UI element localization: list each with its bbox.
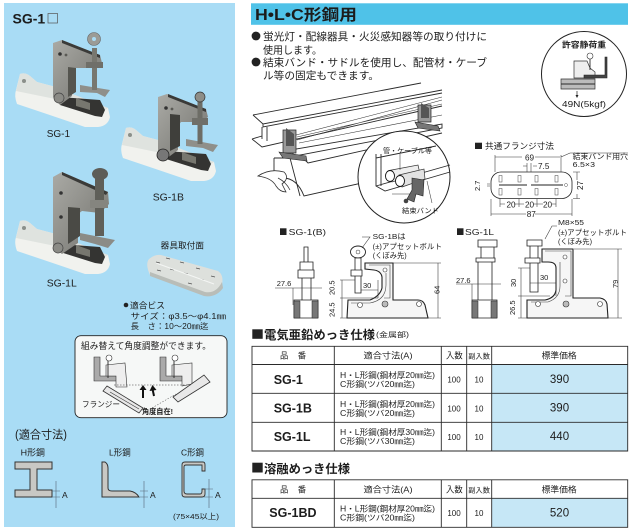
front view: 20.5 (328, 280, 336, 295)
front view (328, 232, 442, 318)
row: SG-1: 100 (447, 376, 461, 384)
row: SG-1BD: C形鋼(ツバ20㎜迄) (340, 512, 415, 522)
diagram: common flange dimensions: 2.7 (473, 181, 482, 191)
compatible screw specification: サイズ：φ3.5～φ4.1㎜ (131, 311, 226, 321)
front view: M8×55 (558, 218, 584, 227)
diagram: common flange dimensions: 共通フランジ寸法 (485, 141, 554, 151)
side view: 27.6 (277, 279, 291, 288)
front view: 64 (432, 286, 442, 294)
front view: 30 (363, 281, 371, 290)
front view: (±)アプセットボルト (558, 228, 627, 237)
photo: mounting face plate (147, 255, 223, 296)
row: SG-1B: 390 (550, 402, 569, 414)
row: SG-1: H・L形鋼(鋼材厚20㎜迄) (340, 370, 435, 380)
fixture: right clamp (415, 103, 440, 131)
callout: pipes and cable tie detail (358, 131, 450, 223)
header row (280, 484, 577, 494)
row: SG-1: SG-1 (274, 373, 303, 387)
heading: electro-galvanized spec (252, 327, 409, 342)
diagram: common flange dimensions (473, 141, 629, 219)
row: SG-1B: 10 (475, 404, 484, 414)
row: SG-1 (274, 370, 569, 389)
illustration: right clamp tilted (160, 355, 210, 402)
row: SG-1BD: SG-1BD (269, 506, 317, 520)
header row: 適合寸法(A) (364, 350, 413, 360)
row: SG-1BD: H・L形鋼(鋼材厚20㎜迄) (340, 504, 435, 514)
row: SG-1L: 100 (447, 433, 461, 442)
feature bullet list (252, 30, 487, 82)
diagram: L steel (102, 448, 156, 508)
diagram: SG-1(B) dimensions: SG-1(B) (289, 227, 326, 237)
diagram: C steel (173, 448, 221, 521)
side view (275, 247, 322, 318)
front view: 26.5 (508, 300, 517, 315)
front view: 24.5 (328, 302, 336, 317)
diagram: L steel: A (150, 490, 156, 500)
diagram: H steel: H形鋼 (21, 448, 45, 458)
diagram: common flange dimensions: 7.5 (538, 162, 550, 171)
diagram: L steel: L形鋼 (109, 448, 131, 458)
label: flange: フランジー (82, 400, 120, 409)
label: free angle: 角度自在! (142, 406, 173, 416)
header row (280, 350, 577, 360)
row: SG-1BD (269, 504, 569, 522)
front view: 79 (611, 280, 620, 288)
header row: 副入数 (468, 352, 490, 360)
row: SG-1L: C形鋼(ツバ30㎜迄) (340, 436, 415, 446)
row: SG-1: 10 (475, 376, 484, 384)
product photo: SG-1 (15, 32, 110, 127)
side view (456, 240, 501, 318)
row: SG-1B (274, 399, 569, 418)
side view: 27.6 (456, 276, 471, 285)
title band: H•L•C形鋼用 (255, 6, 357, 24)
heading: electro-galvanized spec: 電気亜鉛めっき仕様 (264, 327, 375, 342)
row: SG-1BD: 100 (447, 509, 461, 518)
callout: pipes and cable tie detail: 結束バンド (402, 206, 439, 215)
heading: electro-galvanized spec: (金属部) (376, 330, 409, 339)
diagram: common flange dimensions: 6.5×3 (573, 160, 595, 169)
feature bullet list: 結束バンド・サドルを使用し、配管材・ケーブ (263, 56, 487, 69)
product photo: SG-1L (15, 168, 115, 274)
row: SG-1: 390 (550, 374, 569, 386)
diagram: common flange dimensions: 20 (543, 200, 553, 210)
fixture: left clamp (279, 128, 307, 161)
header row: 標準価格 (542, 484, 577, 494)
header row: 適合寸法(A) (364, 484, 413, 494)
illustration: left clamp tilted (94, 355, 143, 413)
feature bullet list: 使用します。 (263, 44, 322, 56)
diagram: common flange dimensions: 結束バンド用穴 (573, 151, 629, 161)
header row: 品 番 (280, 350, 307, 360)
diagram: C steel: A (215, 490, 221, 500)
callout: allowable static load: 49N(5kgf) (562, 99, 606, 109)
front view: SG-1Bは (373, 232, 406, 241)
row: SG-1L: SG-1L (274, 430, 311, 444)
row: SG-1B: 100 (447, 404, 461, 414)
callout: allowable static load: 許容静荷重 (562, 40, 606, 50)
row: SG-1L: 440 (550, 431, 569, 443)
feature bullet list: 蛍光灯・配線器具・火災感知器等の取り付けに (263, 30, 487, 43)
feature bullet list: ル等の固定もできます。 (263, 69, 379, 82)
product photo: SG-1B (121, 92, 218, 181)
diagram: SG-1L dimensions: SG-1L (465, 227, 494, 237)
front view: 30 (509, 279, 518, 287)
diagram: common flange dimensions: 20 (525, 200, 535, 210)
heading: hot-dip spec: 溶融めっき仕様 (264, 461, 350, 476)
diagram: H steel: A (62, 490, 68, 500)
row: SG-1BD: 520 (550, 508, 569, 520)
header row: 品 番 (280, 484, 307, 494)
header row: 副入数 (468, 486, 490, 494)
callout: angle adjustment (75, 336, 227, 418)
front view: 30 (540, 273, 548, 282)
row: SG-1: C形鋼(ツバ20㎜迄) (340, 379, 415, 389)
row: SG-1B: H・L形鋼(鋼材厚20㎜迄) (340, 399, 435, 409)
header row: 入数 (446, 350, 463, 360)
diagram: H steel (15, 448, 68, 508)
front view: (±)アプセットボルト (373, 242, 442, 251)
arrows: angle direction (114, 385, 192, 408)
callout: allowable static load (542, 32, 626, 116)
diagram: common flange dimensions: 87 (527, 210, 536, 219)
diagram: common flange dimensions: 20 (506, 200, 516, 210)
row: SG-1B: C形鋼(ツバ20㎜迄) (340, 408, 415, 418)
front view (508, 218, 627, 318)
header row: 入数 (446, 484, 463, 494)
diagram: common flange dimensions: 27 (576, 180, 585, 190)
callout: pipes and cable tie detail: 管・ケーブル等 (383, 146, 432, 155)
label: SG-1: SG-1 (47, 129, 70, 140)
table: electro-galvanized prices (252, 346, 628, 451)
table: hot-dip prices (252, 480, 628, 528)
diagram: C steel: (75×45以上) (173, 512, 220, 521)
row: SG-1L: 10 (475, 433, 484, 442)
front view: (くぼみ先) (373, 250, 407, 260)
compatible screw specification (124, 300, 226, 331)
illustration: H steel with fixture mounted (252, 83, 442, 196)
compatible screw specification: 適合ビス (130, 300, 165, 310)
row: SG-1L (274, 427, 569, 446)
callout: angle adjustment: 組み替えて角度調整ができます。 (81, 340, 211, 351)
title band (251, 3, 628, 25)
diagram: SG-1L dimensions (456, 218, 627, 318)
model series heading: SG-1 (12, 10, 45, 26)
row: SG-1L: H・L形鋼(鋼材厚30㎜迄) (340, 427, 435, 437)
row: SG-1BD: 10 (475, 509, 484, 518)
label: mounting face: 器具取付面 (161, 240, 204, 250)
pipes (386, 165, 425, 187)
row: SG-1B: SG-1B (274, 402, 312, 416)
header row: 標準価格 (542, 350, 577, 360)
panel: product photos background (4, 3, 235, 527)
label: SG-1L: SG-1L (47, 278, 77, 290)
diagram: SG-1(B) dimensions (275, 227, 442, 318)
front view: (くぼみ先) (558, 236, 592, 246)
heading: compatible dimensions: (適合寸法) (15, 428, 67, 442)
diagram: common flange dimensions: 69 (525, 154, 535, 162)
compatible screw specification: 長 さ：10～20㎜迄 (131, 321, 208, 331)
label: SG-1B: SG-1B (153, 192, 184, 204)
diagram: C steel: C形鋼 (181, 448, 204, 458)
